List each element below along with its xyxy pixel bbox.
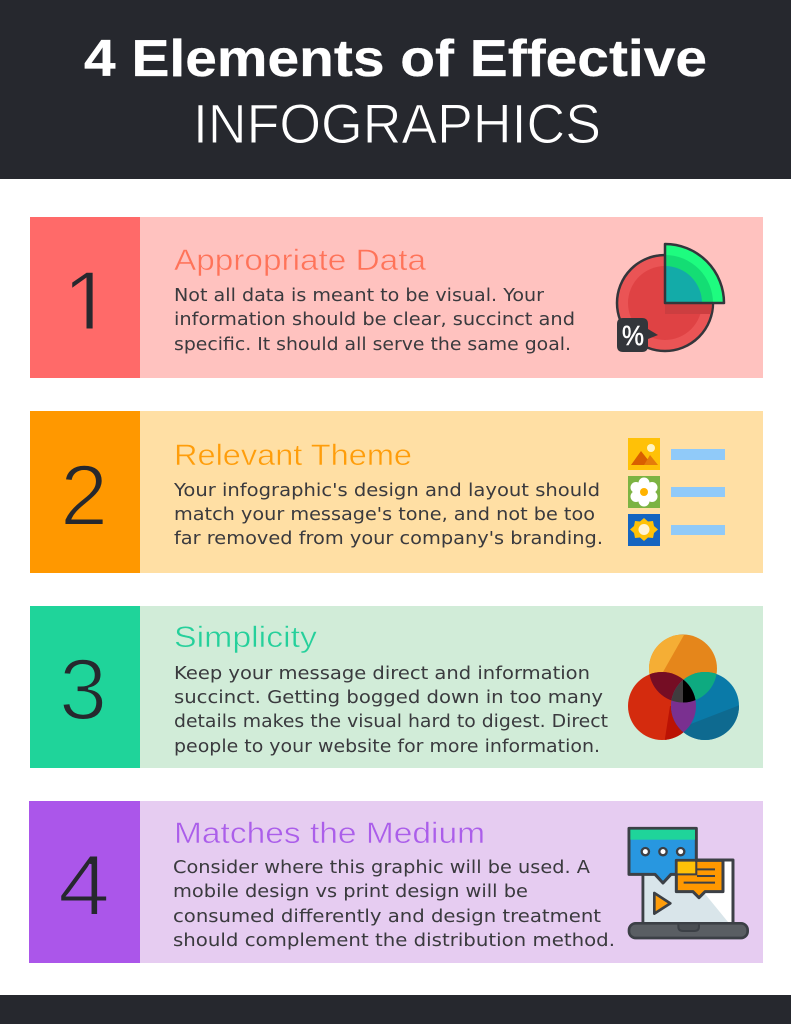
body text: succinct. Getting bogged down in too many (174, 688, 603, 708)
body text (174, 286, 575, 355)
body text: far removed from your company's branding. (174, 529, 603, 549)
footer band (0, 995, 791, 1024)
body text: should complement the distribution method. (173, 931, 615, 951)
panel: simplicity (30, 606, 763, 768)
heading: Matches the Medium (174, 817, 485, 850)
body text: Not all data is meant to be visual. Your (174, 286, 545, 306)
body text (173, 481, 603, 549)
icon: image list (628, 438, 725, 546)
body text: consumed differently and design treatment (173, 907, 601, 927)
body text: details makes the visual hard to digest. Direct (174, 712, 608, 732)
number 3: 3 (59, 642, 107, 738)
icon: pie chart: % (622, 320, 644, 351)
panel: matches the medium (29, 801, 763, 963)
icon: venn diagram (628, 634, 740, 745)
body text (173, 858, 615, 951)
body text: Consider where this graphic will be used. A (173, 858, 590, 878)
panel: appropriate data (30, 217, 763, 378)
body text: information should be clear, succinct and (174, 310, 575, 330)
number 4: 4 (58, 838, 110, 934)
number 1: 1 (62, 253, 114, 355)
icon: pie chart (617, 244, 724, 352)
title: 4 Elements of Effective (84, 30, 707, 88)
heading: Simplicity (174, 621, 317, 654)
subtitle: INFOGRAPHICS (193, 92, 601, 155)
heading: Appropriate Data (174, 244, 426, 277)
number 2: 2 (60, 448, 108, 544)
panel: relevant theme (30, 411, 763, 573)
body text (174, 664, 608, 757)
body text: match your message's tone, and not be too (174, 505, 595, 525)
body text: people to your website for more information. (174, 737, 600, 757)
body text: specific. It should all serve the same goal. (174, 335, 571, 355)
header band (0, 0, 791, 179)
body text: Keep your message direct and information (174, 664, 590, 684)
body text: Your infographic's design and layout should (173, 481, 600, 501)
heading: Relevant Theme (174, 439, 412, 472)
body text: mobile design vs print design will be (173, 882, 528, 902)
icon: laptop with chat bubbles (629, 828, 748, 938)
